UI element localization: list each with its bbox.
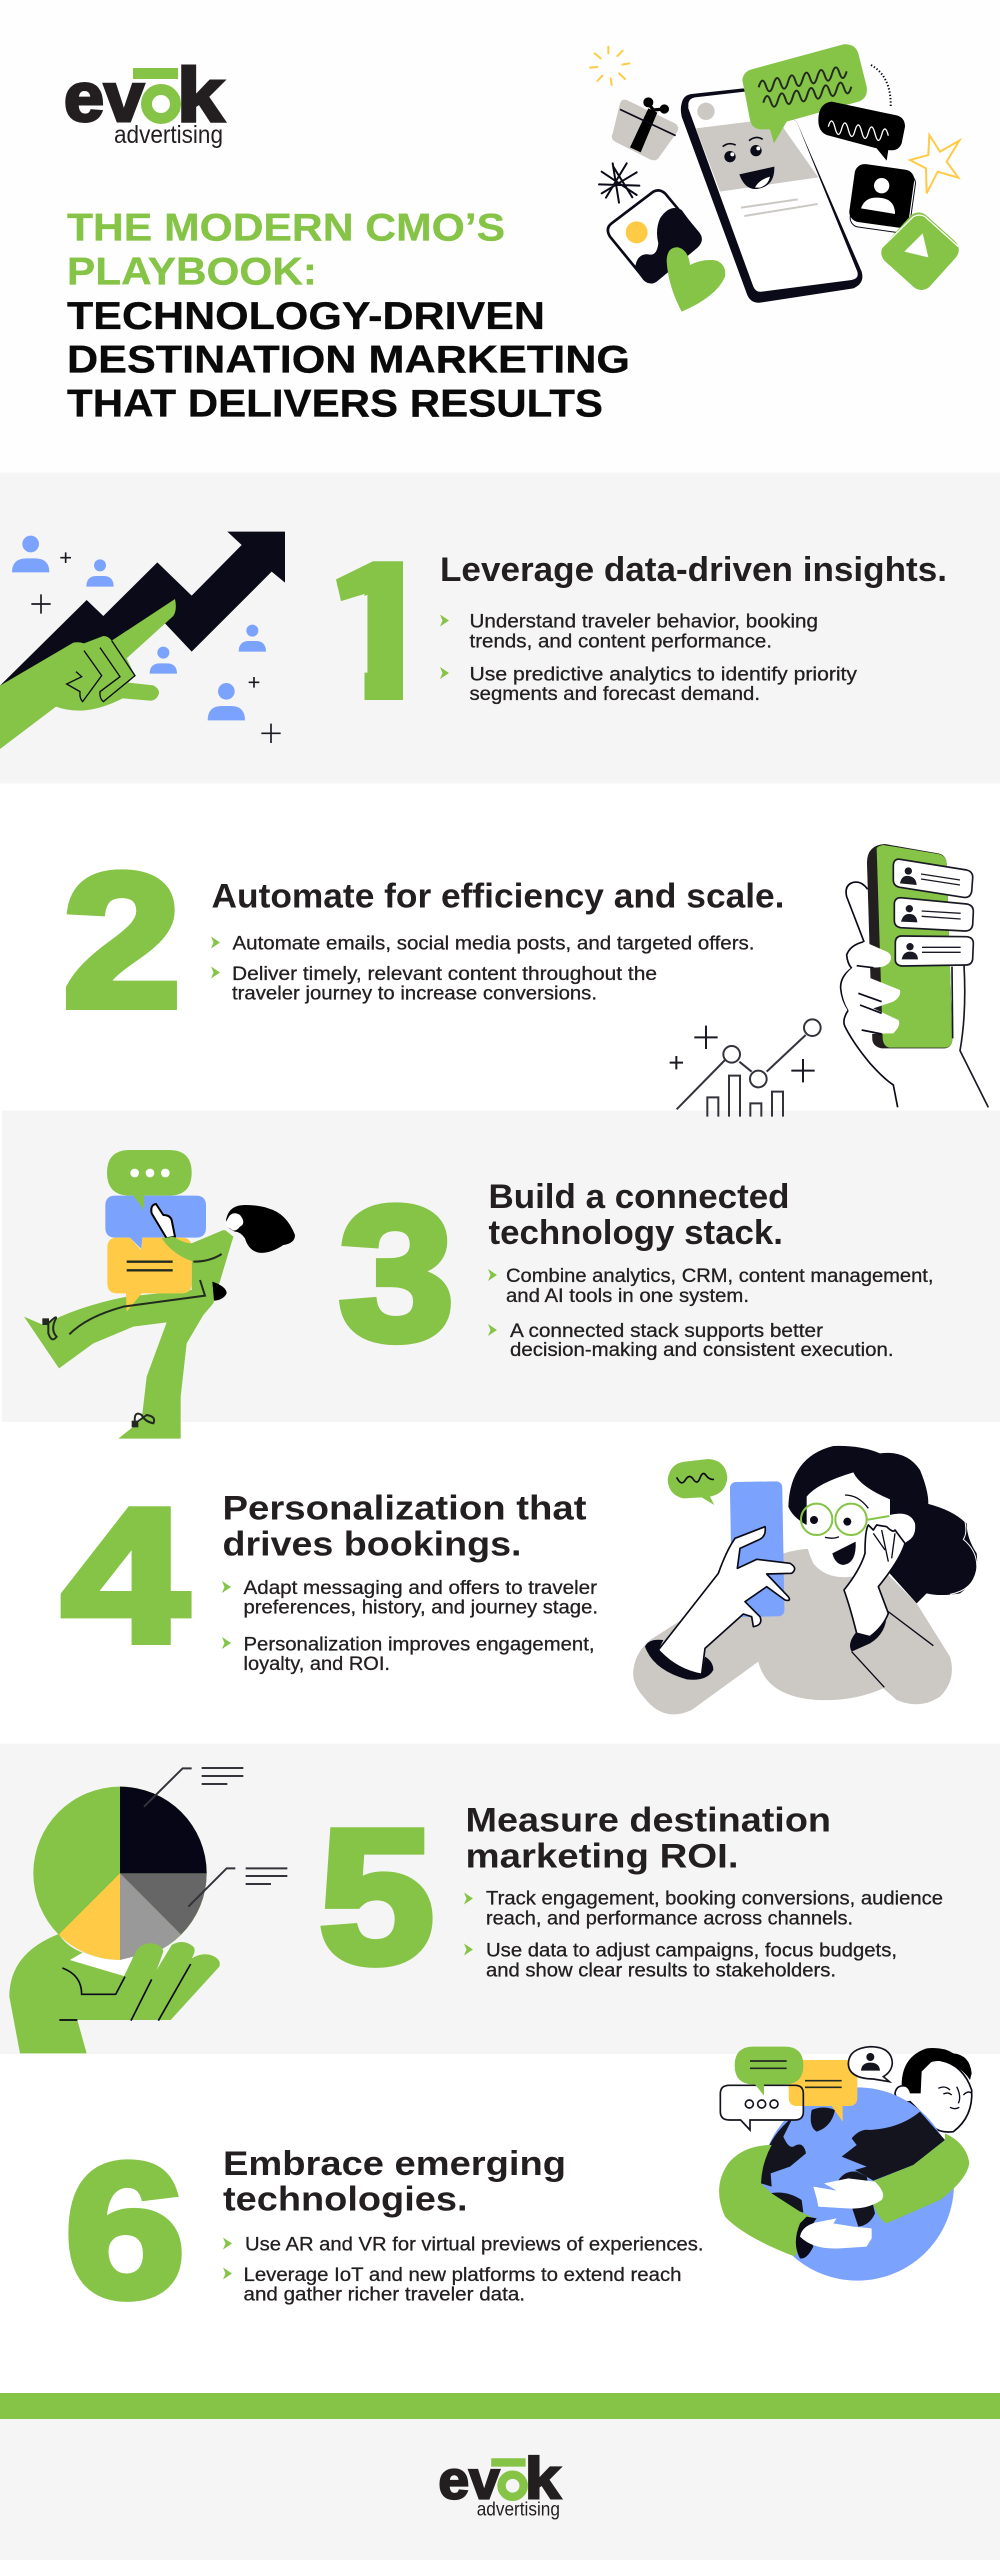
panel: step 2 automate for efficiency <box>0 784 1000 1117</box>
bullets: segments and forecast demand. <box>470 683 760 705</box>
bullets <box>223 2234 704 2306</box>
number 2: 2 <box>63 835 181 1047</box>
bullets: and gather richer traveler data. <box>244 2284 525 2306</box>
bullets: Leverage IoT and new platforms to extend reach <box>244 2264 682 2286</box>
title: THAT DELIVERS RESULTS <box>67 382 603 426</box>
bullets: Combine analytics, CRM, content management, <box>506 1265 934 1287</box>
bullets: Use data to adjust campaigns, focus budgets, <box>486 1940 897 1962</box>
heading: Automate for efficiency and scale. <box>212 878 784 916</box>
illustration: woman looking at phone <box>633 1446 977 1714</box>
heading: Leverage data-driven insights. <box>440 551 947 589</box>
heading: marketing ROI. <box>466 1838 738 1876</box>
bullets: Use AR and VR for virtual previews of experiences. <box>245 2234 704 2256</box>
panel: step 6 embrace emerging technologies <box>0 2047 1000 2393</box>
panel: step 1 leverage data-driven insights <box>0 472 1000 784</box>
bullets <box>211 932 754 1004</box>
bullets: and show clear results to stakeholders. <box>486 1960 836 1982</box>
heading: Embrace emerging <box>223 2145 566 2183</box>
heading <box>222 1490 586 1564</box>
title <box>67 206 630 426</box>
title: DESTINATION MARKETING <box>67 338 630 382</box>
logo: evok advertising footer: ev <box>438 2452 500 2511</box>
bullets: Track engagement, booking conversions, audience <box>486 1888 943 1910</box>
bullets: Automate emails, social media posts, and targeted offers. <box>232 932 754 954</box>
bullets: Understand traveler behavior, booking <box>470 610 818 632</box>
bullets: A connected stack supports better <box>510 1320 824 1342</box>
panel: step 5 measure destination marketing ROI <box>0 1744 1000 2054</box>
illustration: figure kicking with speech bubbles <box>24 1150 295 1439</box>
bullets: preferences, history, and journey stage. <box>244 1596 598 1618</box>
heading: Measure destination <box>466 1802 831 1840</box>
heading <box>223 2145 566 2218</box>
logo: evok advertising footer: k <box>525 2447 562 2512</box>
bullets: Use predictive analytics to identify priority <box>470 664 857 686</box>
logo: evok advertising footer <box>438 2447 562 2521</box>
illustration: hand pointing at rising arrow with people <box>0 532 285 749</box>
logo: evok advertising: k <box>177 53 225 138</box>
bullets <box>440 610 857 705</box>
logo: evok advertising footer: advertising <box>477 2500 560 2521</box>
bullets: trends, and content performance. <box>470 630 772 652</box>
panel: step 4 personalization <box>0 1422 1000 1744</box>
panel: step 3 connected technology stack <box>2 1110 1000 1439</box>
logo: evok advertising: ev <box>64 58 144 136</box>
heading: Personalization that <box>222 1490 586 1528</box>
number 6: 6 <box>65 2125 185 2337</box>
bullets: traveler journey to increase conversions. <box>232 982 597 1004</box>
bullets <box>488 1265 934 1361</box>
bullets: reach, and performance across channels. <box>486 1908 853 1930</box>
illustration: phone with social icons <box>590 44 964 312</box>
bullets: Adapt messaging and offers to traveler <box>244 1577 598 1599</box>
heading: drives bookings. <box>222 1526 522 1564</box>
bullets: decision-making and consistent execution. <box>510 1339 894 1361</box>
illustration: hand holding pie chart <box>9 1768 287 2053</box>
bullets: and AI tools in one system. <box>506 1285 749 1307</box>
number 4: 4 <box>62 1470 188 1682</box>
heading: technologies. <box>223 2180 468 2218</box>
logo: evok advertising <box>64 53 225 149</box>
number 3: 3 <box>339 1168 454 1380</box>
panel: header <box>64 44 964 425</box>
number 1: 1 <box>314 525 454 737</box>
bullets: loyalty, and ROI. <box>244 1653 390 1675</box>
panel: footer <box>0 2419 1000 2560</box>
logo: evok advertising: advertising <box>114 121 223 149</box>
illustration: person hugging globe with chat bubbles <box>719 2047 972 2281</box>
title: PLAYBOOK: <box>67 250 317 294</box>
title: THE MODERN CMO’S <box>67 206 505 250</box>
heading <box>488 1178 790 1252</box>
heading: technology stack. <box>488 1214 783 1252</box>
bullets <box>464 1888 943 1982</box>
number 5: 5 <box>319 1791 434 2003</box>
heading: Build a connected <box>488 1178 790 1216</box>
bullets <box>222 1577 598 1675</box>
title: TECHNOLOGY-DRIVEN <box>67 295 545 338</box>
bullets: Personalization improves engagement, <box>244 1634 594 1656</box>
heading <box>466 1802 831 1876</box>
bullets: Deliver timely, relevant content throughout the <box>232 963 657 985</box>
footer band <box>0 2393 1000 2419</box>
illustration: hand holding phone and line chart <box>670 844 988 1117</box>
